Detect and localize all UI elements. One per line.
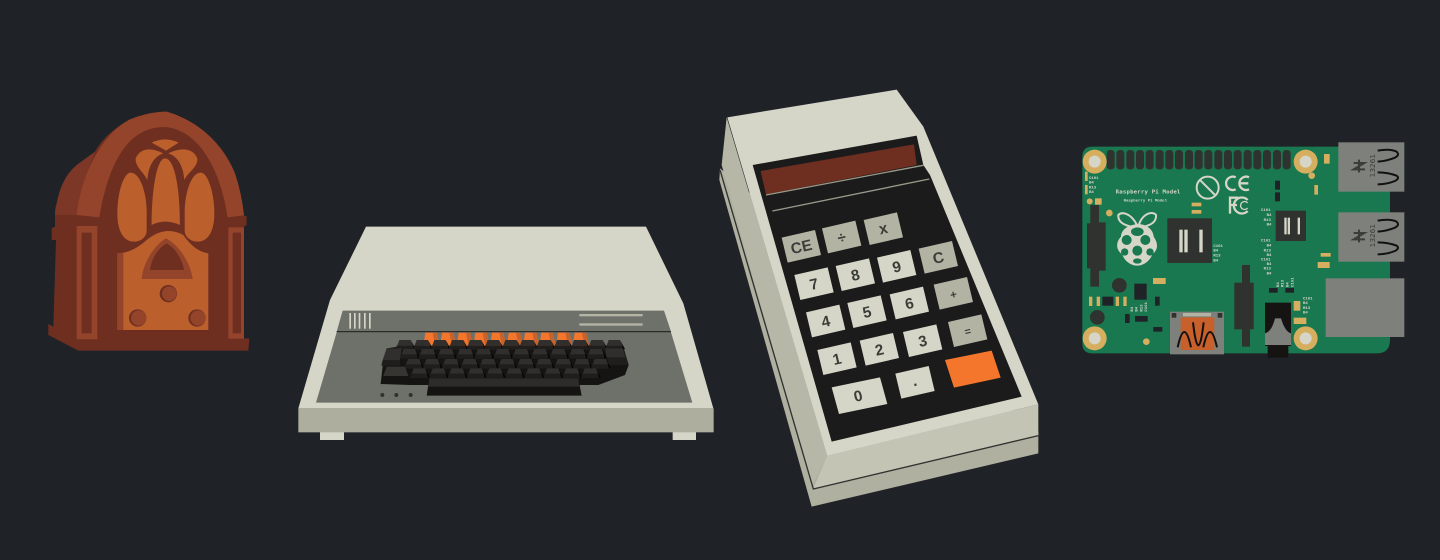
component labels: B4: [1303, 312, 1308, 316]
key: 1: [817, 342, 857, 375]
left display connector: [1087, 205, 1106, 287]
component labels: [1089, 177, 1313, 316]
key: decimal point: [895, 366, 935, 399]
key: 8: 8: [849, 266, 862, 285]
keyboard keys: [381, 340, 629, 385]
panel shadow: [117, 253, 123, 330]
component labels: C101: [1089, 177, 1099, 181]
key: 9: 9: [891, 258, 903, 277]
component labels: C101: [1261, 240, 1271, 244]
key: equals: =: [964, 325, 972, 339]
key: 8: [836, 258, 875, 291]
component labels: B4: [1267, 244, 1272, 248]
key: 9: [877, 250, 916, 283]
gold solder pads: [1085, 154, 1331, 345]
speaker and dial panel: [117, 231, 208, 330]
key: 7: [794, 267, 834, 300]
key: 2: [860, 333, 899, 366]
component labels: B4: [1267, 214, 1272, 218]
component labels: B4: [1213, 250, 1219, 254]
calculator front face: [813, 404, 1038, 488]
radio arch: [77, 112, 244, 217]
illustration: raspberry pi board: [1082, 142, 1404, 358]
key: divide: ÷: [836, 229, 848, 247]
key: plus: +: [949, 289, 959, 302]
key: 6: [890, 287, 929, 319]
raspberry pi logo: [1117, 213, 1157, 266]
no-symbol mark: [1197, 177, 1219, 199]
GPIO header: [1107, 150, 1291, 169]
upper USB port: 13261: [1368, 154, 1377, 177]
illustration: pocket calculator: [719, 90, 1038, 507]
lower USB port: [1338, 212, 1404, 262]
radio side shade: [55, 152, 95, 215]
key: 3: [903, 324, 942, 357]
mounting holes: [1083, 150, 1318, 350]
key: C: C: [931, 249, 946, 268]
circuit board: [1082, 147, 1390, 353]
key: 0: 0: [852, 387, 864, 406]
computer feet: [320, 432, 696, 440]
tuning dial: [142, 238, 193, 279]
key: CE: [782, 230, 821, 263]
key: 1: 1: [831, 350, 844, 369]
key: 5: [847, 295, 887, 328]
key: multiply: [864, 212, 903, 245]
component labels: R13: [1264, 268, 1271, 272]
label lines: [579, 314, 643, 326]
key: 5: 5: [861, 303, 874, 322]
key: CE: CE: [789, 237, 814, 258]
orange function keys: [423, 333, 589, 347]
ethernet port: [1326, 278, 1404, 337]
secondary chip: [1276, 211, 1306, 241]
component labels: C101: [1213, 245, 1224, 249]
key: divide: [822, 221, 861, 253]
right window: [185, 173, 214, 242]
calculator base: [719, 168, 1038, 507]
key: 4: [806, 305, 845, 337]
component labels: B4: [1136, 306, 1140, 312]
board model text: Raspberry Pi Model: [1124, 199, 1168, 204]
camera connector: [1234, 265, 1254, 347]
centre knob: [160, 285, 177, 302]
key: 3: 3: [917, 333, 929, 351]
upper control strip: [337, 311, 671, 332]
left window: [117, 173, 147, 242]
component labels: B4: [1267, 263, 1272, 267]
component labels: R13: [1140, 304, 1144, 312]
component labels: C101: [1261, 209, 1271, 213]
component labels: R13: [1282, 279, 1286, 287]
component labels: R13: [1303, 307, 1311, 311]
key: 0: [832, 377, 887, 414]
key: C: [919, 241, 958, 274]
centre window: [152, 158, 180, 225]
component labels: C101: [1145, 301, 1149, 312]
display window: [761, 144, 917, 194]
component labels: B4: [1286, 282, 1290, 287]
lower USB port: 13261: [1368, 224, 1377, 247]
component labels: C101: [1303, 297, 1313, 301]
component labels: B4: [1267, 254, 1272, 258]
key: 6: 6: [903, 295, 916, 313]
key: 2: 2: [873, 341, 886, 360]
component labels: B4: [1303, 302, 1308, 306]
component labels: B4: [1267, 224, 1272, 228]
key: plus: [934, 277, 973, 310]
HDMI port: [1170, 312, 1224, 354]
top tracery: [136, 139, 197, 180]
indicator lights: [380, 393, 413, 397]
board model text: [1116, 190, 1181, 204]
left knob: [129, 309, 146, 327]
component labels: B4: [1089, 182, 1094, 186]
key: decimal point: .: [911, 373, 919, 390]
base seam line: [720, 170, 1038, 489]
main processor chip: [1167, 218, 1212, 263]
key: 4: 4: [820, 313, 832, 331]
component labels: B4: [1267, 272, 1272, 276]
right knob: [188, 309, 206, 327]
upper USB port: [1338, 142, 1404, 192]
key: orange: [945, 351, 1001, 388]
left side pillar: [77, 226, 97, 339]
vent slots: [349, 313, 371, 329]
illustration: home computer: [298, 227, 714, 440]
component labels: B4: [1131, 306, 1135, 312]
small dark components: [1090, 181, 1294, 332]
key: equals: [948, 314, 987, 347]
component labels: C101: [1261, 258, 1271, 262]
component labels: R13: [1264, 249, 1271, 253]
calculator left face: [722, 117, 827, 487]
component labels: R13: [1213, 254, 1221, 258]
component labels: B4: [1213, 260, 1219, 264]
right side pillar: [228, 227, 244, 339]
component labels: B4: [1089, 191, 1094, 195]
keyboard deck: [316, 332, 692, 403]
calculator top face: [727, 90, 1038, 456]
computer top case: [298, 227, 713, 408]
computer front edge: [298, 408, 714, 432]
illustration: cathedral radio: [48, 112, 249, 351]
key: 7: 7: [808, 276, 820, 294]
audio jack: [1265, 303, 1291, 358]
component labels: R13: [1264, 219, 1271, 223]
key: multiply: x: [877, 220, 890, 238]
component labels: R13: [1089, 186, 1097, 190]
CE and FCC marks: [1226, 177, 1249, 214]
board model text: Raspberry Pi Model: [1116, 190, 1181, 196]
key panel: [753, 136, 1022, 442]
component labels: C101: [1291, 277, 1295, 287]
component labels: B4: [1277, 282, 1281, 287]
space bar: [427, 378, 582, 396]
radio body silhouette: [48, 112, 249, 351]
